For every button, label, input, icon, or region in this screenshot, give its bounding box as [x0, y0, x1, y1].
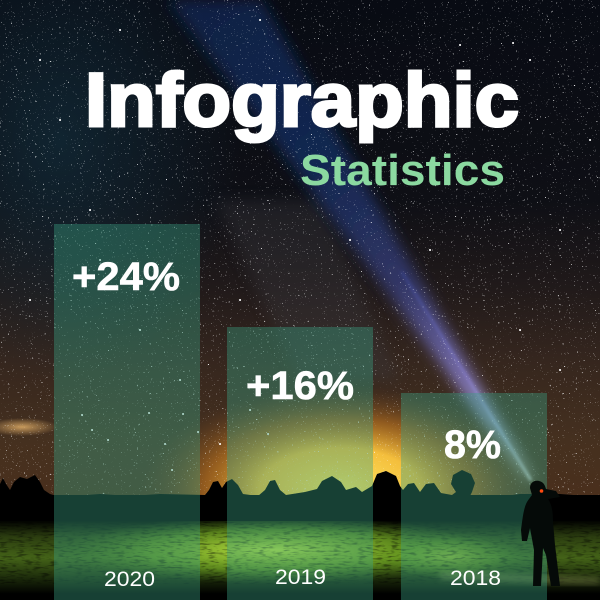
person with headlamp silhouette: [521, 481, 560, 586]
left cloud: [0, 418, 58, 436]
year: 2020: 2020: [104, 568, 155, 591]
bar: 2020: [54, 224, 200, 600]
horizon glow: [140, 385, 540, 595]
year: 2018: 2018: [450, 567, 501, 590]
value: +16%: +16%: [246, 364, 354, 408]
value: 8%: 8%: [444, 423, 501, 467]
year: 2019: 2019: [275, 566, 326, 589]
bar: 2018: [401, 393, 547, 600]
bar: 2019: [227, 327, 373, 600]
ground with grass: [0, 495, 600, 600]
tree line silhouette: [0, 470, 600, 521]
value: +24%: +24%: [72, 255, 180, 299]
subtitle: Statistics: [300, 146, 505, 195]
light beam: [168, 0, 532, 480]
title: Infographic: [85, 58, 519, 143]
milky way haze: [215, 200, 400, 380]
